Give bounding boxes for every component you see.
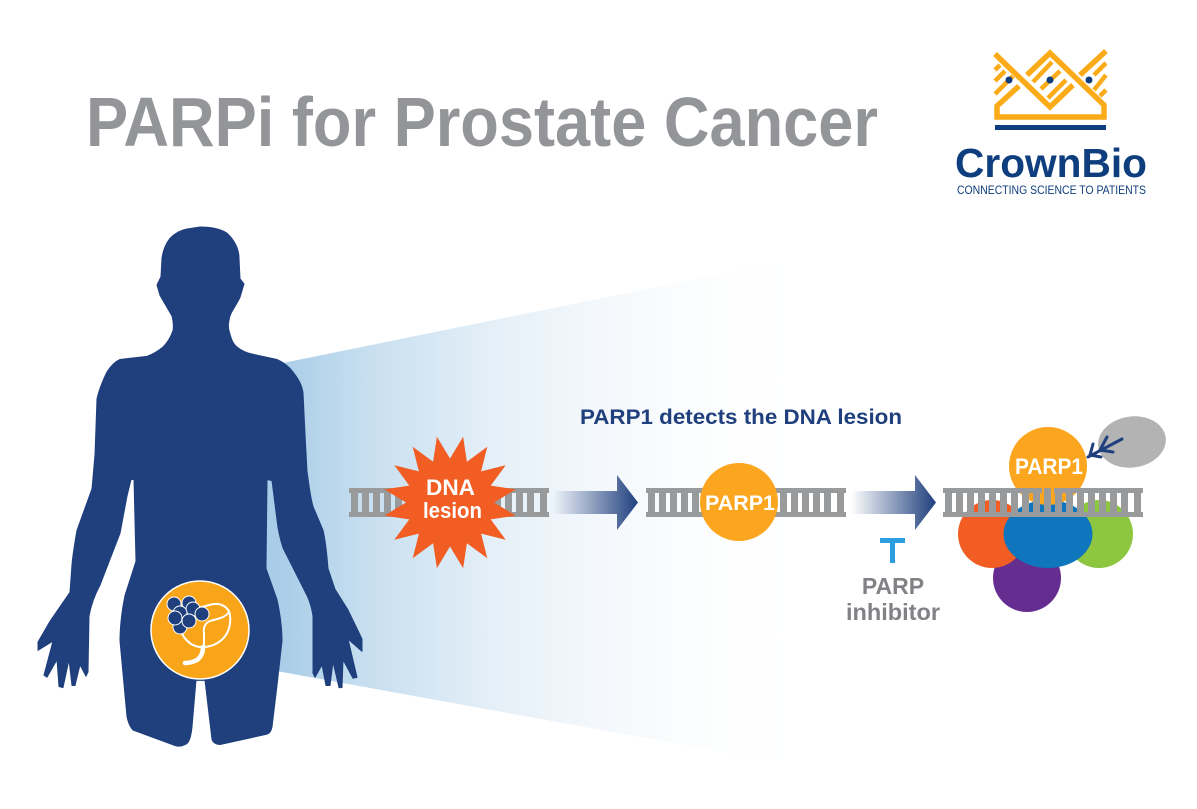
icon: DNA lesion starburst: DNA: [426, 475, 475, 500]
icon: DNA lesion starburst: [384, 437, 516, 568]
icon: inhibition symbol: [880, 538, 905, 563]
icon: prostate tumour: [151, 581, 249, 679]
DNA strand with lesion: [349, 437, 549, 568]
arrow: detection to repair complex: [851, 475, 936, 530]
icon: DNA lesion starburst: lesion: [423, 498, 482, 523]
tumour cells: [167, 596, 209, 634]
repair protein: red: [958, 500, 1026, 568]
repair protein: green: [1065, 500, 1133, 568]
grey substrate protein: [1095, 412, 1169, 472]
logo: CrownBio: [955, 51, 1147, 197]
DNA strand with PARP1 bound: [646, 463, 846, 541]
DNA strand: [943, 488, 1143, 517]
title: PARPi for Prostate Cancer: [86, 83, 878, 161]
icon: crown: [995, 51, 1106, 130]
PARP1 label: PARP1: [1015, 454, 1083, 479]
PARP1 protein: [1009, 427, 1087, 505]
label: PARP inhibitor: PARP: [862, 573, 924, 599]
repair protein: blue: [1004, 500, 1092, 568]
repair complex: [943, 412, 1169, 612]
body silhouette: [38, 227, 362, 746]
logo wordmark: CrownBio: [955, 140, 1147, 186]
heading: PARP1 detects the DNA lesion: PARP1 detects the DNA lesion: [580, 406, 902, 429]
icon: PAR chain: [1088, 437, 1122, 457]
PARP1 protein: [700, 463, 778, 541]
arrow: lesion to detection: [553, 475, 638, 530]
PARP1 protein: PARP1: [705, 492, 775, 515]
repair protein: purple: [993, 544, 1061, 612]
magnification beam: [260, 258, 800, 766]
logo tagline: CONNECTING SCIENCE TO PATIENTS: [957, 183, 1146, 197]
prostate outline: [179, 604, 230, 663]
label: PARP inhibitor: inhibitor: [846, 599, 940, 625]
